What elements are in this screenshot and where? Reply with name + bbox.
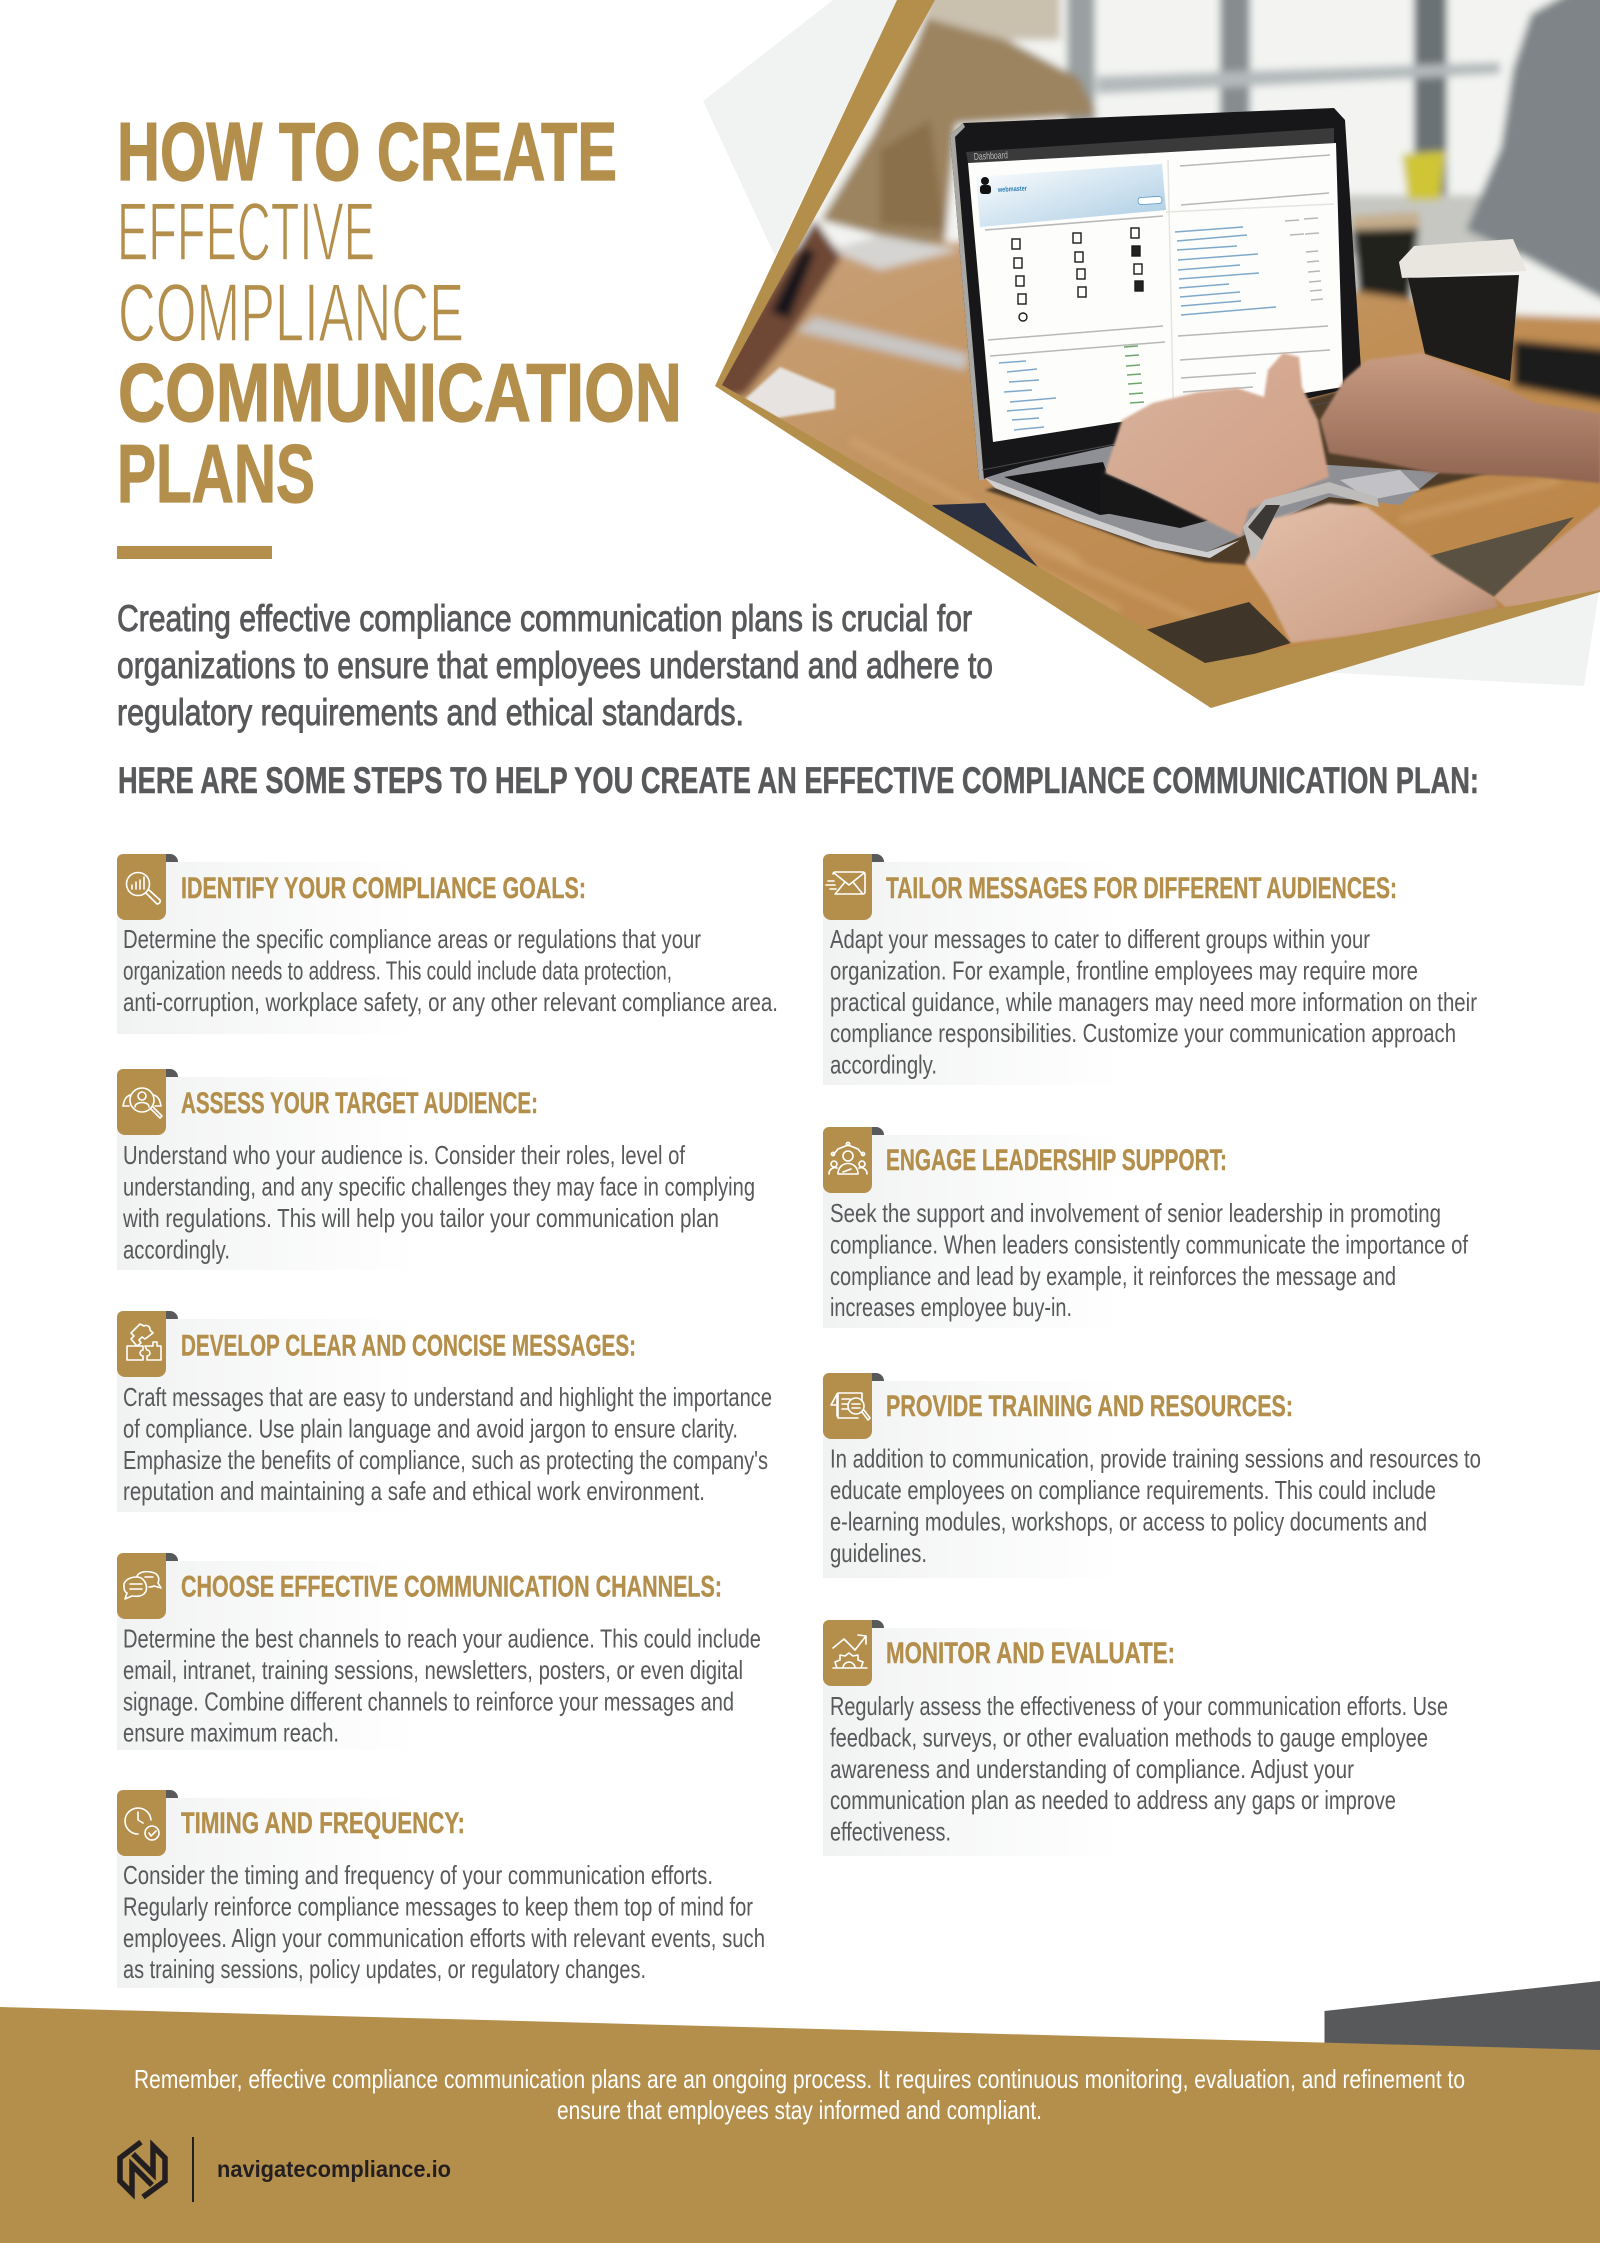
body text <box>830 1198 1469 1322</box>
body text: Understand who your audience is. Consider their roles, level of <box>123 1140 686 1170</box>
wood grain <box>913 473 1560 618</box>
footer band <box>0 2007 1600 2243</box>
icon: hexagon N mark <box>120 2142 165 2197</box>
body text: reputation and maintaining a safe and ethical work environment. <box>123 1476 705 1506</box>
body text: Determine the specific compliance areas or regulations that your <box>123 924 701 954</box>
body text: of compliance. Use plain language and avoid jargon to ensure clarity. <box>123 1413 738 1443</box>
icon: leader and team network <box>823 1127 872 1193</box>
body text: anti-corruption, workplace safety, or any other relevant compliance area. <box>123 987 778 1017</box>
body text <box>122 1140 755 1264</box>
left hand <box>1105 353 1329 537</box>
body text <box>123 1382 772 1506</box>
coffee cup <box>1399 239 1527 381</box>
panel: monitor and evaluate <box>823 1620 1448 1856</box>
panel: monitor and evaluate: MONITOR AND EVALUATE: <box>886 1637 1175 1670</box>
body text: understanding, and any specific challenges they may face in complying <box>123 1172 755 1202</box>
body text: e-learning modules, workshops, or access to policy documents and <box>830 1506 1427 1536</box>
panel: engage leadership support <box>823 1127 1469 1328</box>
body text: organization needs to address. This could include data protection, <box>123 956 672 986</box>
intro paragraph: Creating effective compliance communication plans is crucial for <box>117 598 972 639</box>
body text: increases employee buy-in. <box>830 1292 1072 1322</box>
title: COMMUNICATION <box>118 346 682 439</box>
body text: signage. Combine different channels to reinforce your messages and <box>123 1686 734 1716</box>
icon: documents and magnifier <box>823 1373 872 1439</box>
body text: Consider the timing and frequency of your communication efforts. <box>123 1860 713 1890</box>
icon: puzzle pieces <box>117 1311 166 1377</box>
laptop screen content icons <box>1012 228 1143 321</box>
body text <box>123 1860 765 1984</box>
icon: notebook on table <box>745 367 835 418</box>
body text: with regulations. This will help you tailor your communication plan <box>122 1203 719 1233</box>
panel: timing and frequency <box>117 1790 765 1988</box>
body text: feedback, surveys, or other evaluation methods to gauge employee <box>830 1722 1428 1752</box>
body text <box>830 1691 1448 1847</box>
gold frame behind photo <box>715 0 1600 708</box>
body text: Seek the support and involvement of senior leadership in promoting <box>830 1198 1441 1228</box>
panel: identify your compliance goals: IDENTIFY YOUR COMPLIANCE GOALS: <box>181 872 586 905</box>
wrist watch <box>1243 482 1379 563</box>
decorative light grey shape: lower right <box>1320 585 1600 686</box>
footer accent: dark shape <box>1324 1981 1600 2060</box>
body text: effectiveness. <box>830 1817 951 1847</box>
body text: Adapt your messages to cater to different groups within your <box>830 924 1370 954</box>
panel: develop clear and concise messages: DEVELOP CLEAR AND CONCISE MESSAGES: <box>181 1330 636 1362</box>
footer message <box>134 2064 1465 2125</box>
body text: ensure maximum reach. <box>123 1718 339 1748</box>
laptop keyboard base <box>985 446 1440 558</box>
body text: guidelines. <box>830 1538 927 1568</box>
body text: Regularly reinforce compliance messages to keep them top of mind for <box>123 1891 753 1921</box>
panel: provide training and resources: PROVIDE TRAINING AND RESOURCES: <box>886 1390 1293 1423</box>
laptop lid <box>950 108 1500 565</box>
body text: email, intranet, training sessions, newsletters, posters, or even digital <box>123 1655 743 1685</box>
decorative light grey shape: top <box>703 0 897 256</box>
phone on table <box>932 503 1038 567</box>
panel: choose effective communication channels <box>117 1553 761 1750</box>
icon: magnifier over chart <box>117 854 166 920</box>
panel: tailor messages for different audiences: TAILOR MESSAGES FOR DIFFERENT AUDIENCES: <box>886 872 1397 905</box>
icon: people and magnifier <box>117 1069 166 1135</box>
body text: educate employees on compliance requirements. This could include <box>830 1475 1436 1505</box>
panel: timing and frequency: TIMING AND FREQUENCY: <box>181 1807 465 1840</box>
icon: envelope <box>823 854 872 920</box>
body text: Determine the best channels to reach your audience. This could include <box>123 1624 761 1654</box>
icon: gear with rising arrow <box>823 1620 872 1686</box>
laptop screen title: Dashboard <box>974 150 1008 163</box>
intro paragraph <box>117 598 993 733</box>
body text: organization. For example, frontline employees may require more <box>830 955 1418 985</box>
logo: navigatecompliance.io <box>120 2137 451 2202</box>
body text <box>830 1444 1481 1568</box>
title underline <box>117 546 272 559</box>
intro paragraph: organizations to ensure that employees understand and adhere to <box>117 645 993 686</box>
laptop screen rows <box>985 155 1334 440</box>
body text: awareness and understanding of compliance. Adjust your <box>830 1754 1354 1784</box>
title <box>117 105 682 520</box>
laptop screen welcome panel <box>976 164 1166 227</box>
panel: engage leadership support: ENGAGE LEADERSHIP SUPPORT: <box>886 1144 1227 1177</box>
body text: employees. Align your communication efforts with relevant events, such <box>123 1923 765 1953</box>
body text: communication plan as needed to address any gaps or improve <box>830 1785 1396 1815</box>
panel: tailor messages for different audiences <box>823 854 1477 1085</box>
photo: hands typing on a laptop showing a dashboard <box>680 0 1600 700</box>
title: HOW TO CREATE <box>117 105 617 198</box>
intro paragraph: regulatory requirements and ethical standards. <box>117 692 744 733</box>
body text: as training sessions, policy updates, or regulatory changes. <box>123 1954 646 1984</box>
title: COMPLIANCE <box>118 266 464 359</box>
forearm <box>1245 490 1600 643</box>
panel: develop clear and concise messages <box>117 1311 772 1512</box>
body text: accordingly. <box>830 1050 937 1080</box>
panel: assess your target audience <box>117 1069 755 1270</box>
logo: navigatecompliance.io: navigatecompliance.io <box>217 2156 451 2182</box>
laptop screen welcome panel: webmaster <box>997 185 1027 194</box>
body text <box>123 924 778 1017</box>
body text: compliance and lead by example, it reinforces the message and <box>830 1261 1396 1291</box>
panel: provide training and resources <box>823 1373 1481 1578</box>
icon: chat bubbles <box>117 1553 166 1619</box>
table front and shadow <box>1145 517 1574 668</box>
panel: identify your compliance goals <box>117 854 778 1034</box>
panel: choose effective communication channels: CHOOSE EFFECTIVE COMMUNICATION CHANNELS: <box>181 1571 722 1604</box>
icon: clock with check <box>117 1790 166 1856</box>
footer message: ensure that employees stay informed and compliant. <box>557 2095 1042 2125</box>
body text: Craft messages that are easy to understand and highlight the importance <box>123 1382 772 1412</box>
body text: Emphasize the benefits of compliance, such as protecting the company's <box>123 1445 768 1475</box>
panel: assess your target audience: ASSESS YOUR TARGET AUDIENCE: <box>181 1087 538 1120</box>
right hand <box>1320 353 1600 483</box>
photo background: window and people <box>722 0 1600 634</box>
title: PLANS <box>117 427 315 520</box>
title: EFFECTIVE <box>117 185 375 278</box>
body text <box>830 924 1477 1080</box>
body text: accordingly. <box>123 1234 230 1264</box>
body text <box>123 1624 761 1748</box>
